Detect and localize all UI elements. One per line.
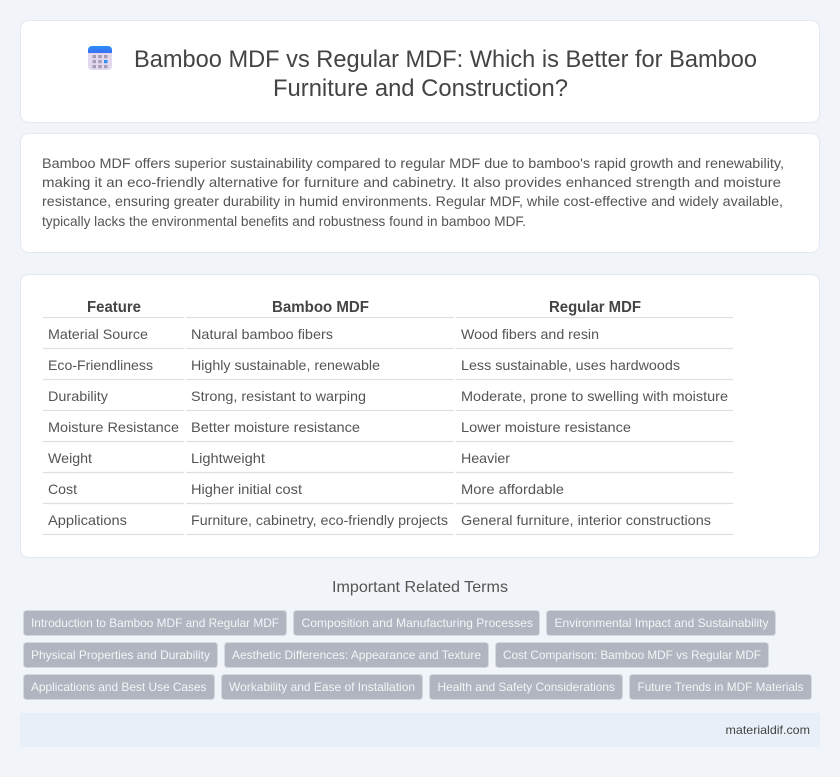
tag: Physical Properties and Durability bbox=[31, 648, 210, 662]
summary text: resistance, ensuring greater durability in humid environments. Regular MDF, while cost-effective and widely available, bbox=[42, 193, 783, 209]
tag: Workability and Ease of Installation bbox=[229, 680, 415, 694]
row: applications bbox=[48, 512, 711, 528]
row: durability: Strong, resistant to warping bbox=[191, 388, 366, 404]
row: material source: Natural bamboo fibers bbox=[191, 326, 333, 342]
tag: Environmental Impact and Sustainability bbox=[554, 616, 768, 630]
table header: Bamboo MDF bbox=[272, 299, 369, 316]
row: eco-friendliness: Eco-Friendliness bbox=[48, 357, 153, 373]
tag bbox=[24, 642, 218, 668]
title: Bamboo MDF vs Regular MDF: Which is Better for Bamboo bbox=[134, 46, 757, 73]
row: material source: Material Source bbox=[48, 326, 148, 342]
tag bbox=[224, 642, 488, 668]
table header: Feature bbox=[87, 299, 141, 316]
tag bbox=[24, 610, 286, 636]
panel: header bbox=[20, 20, 820, 122]
panel: summary paragraph bbox=[20, 134, 820, 252]
title: Furniture and Construction? bbox=[273, 75, 568, 102]
row: material source: Wood fibers and resin bbox=[461, 326, 599, 342]
tag: Cost Comparison: Bamboo MDF vs Regular MDF bbox=[503, 648, 761, 662]
tag: Future Trends in MDF Materials bbox=[638, 680, 804, 694]
row: weight bbox=[48, 450, 510, 466]
tag: Aesthetic Differences: Appearance and Texture bbox=[232, 648, 481, 662]
tag: Applications and Best Use Cases bbox=[31, 680, 206, 694]
tag: Health and Safety Considerations bbox=[438, 680, 615, 694]
summary text bbox=[42, 155, 784, 229]
tag bbox=[294, 610, 540, 636]
row: eco-friendliness: Less sustainable, uses hardwoods bbox=[461, 357, 680, 373]
table header: Regular MDF bbox=[549, 299, 641, 316]
row: cost: Cost bbox=[48, 481, 77, 497]
summary text: making it an eco-friendly alternative for furniture and cabinetry. It also provides enhanced strength and moisture bbox=[42, 174, 781, 190]
row: applications: General furniture, interior constructions bbox=[461, 512, 711, 528]
tag bbox=[496, 642, 768, 668]
tag bbox=[630, 674, 812, 700]
related terms tags bbox=[24, 610, 812, 700]
summary text: Bamboo MDF offers superior sustainability compared to regular MDF due to bamboo's rapid growth and renewability, bbox=[42, 155, 784, 171]
icon: calendar bbox=[88, 46, 112, 70]
row: applications: Applications bbox=[48, 512, 127, 528]
heading: important related terms: Important Related Terms bbox=[332, 579, 508, 596]
row: cost: More affordable bbox=[461, 481, 564, 497]
footer source text: materialdif.com bbox=[726, 723, 810, 737]
row: cost bbox=[48, 481, 564, 497]
footer bar bbox=[20, 713, 820, 747]
row: moisture resistance: Better moisture resistance bbox=[191, 419, 360, 435]
title bbox=[134, 46, 757, 102]
row: moisture resistance bbox=[48, 419, 631, 435]
row: eco-friendliness: Highly sustainable, renewable bbox=[191, 357, 380, 373]
tag: Introduction to Bamboo MDF and Regular MDF bbox=[31, 616, 279, 630]
row: durability bbox=[48, 388, 728, 404]
summary text: typically lacks the environmental benefits and robustness found in bamboo MDF. bbox=[42, 213, 526, 229]
row: durability: Moderate, prone to swelling with moisture bbox=[461, 388, 728, 404]
row: moisture resistance: Lower moisture resistance bbox=[461, 419, 631, 435]
row: weight: Lightweight bbox=[191, 450, 265, 466]
row: cost: Higher initial cost bbox=[191, 481, 302, 497]
row: durability: Durability bbox=[48, 388, 108, 404]
row: weight: Weight bbox=[48, 450, 92, 466]
tag bbox=[546, 610, 776, 636]
row: eco-friendliness bbox=[48, 357, 680, 373]
row: material source bbox=[48, 326, 599, 342]
row: moisture resistance: Moisture Resistance bbox=[48, 419, 179, 435]
row: weight: Heavier bbox=[461, 450, 510, 466]
tag bbox=[430, 674, 622, 700]
row: applications: Furniture, cabinetry, eco-friendly projects bbox=[191, 512, 448, 528]
panel: comparison table bbox=[20, 274, 820, 558]
tag bbox=[24, 674, 214, 700]
tag bbox=[222, 674, 422, 700]
tag: Composition and Manufacturing Processes bbox=[302, 616, 533, 630]
table header bbox=[87, 299, 641, 316]
